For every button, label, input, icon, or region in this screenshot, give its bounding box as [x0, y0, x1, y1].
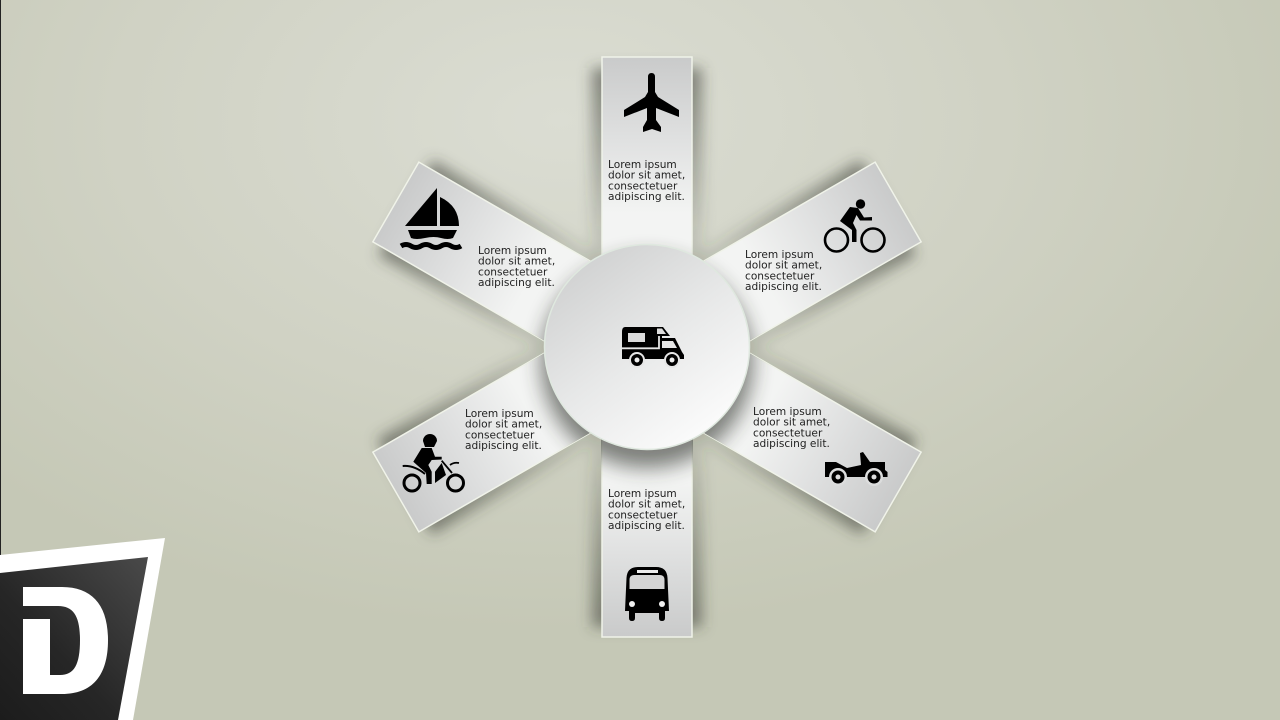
text: bicycle: dolor sit amet, [745, 260, 822, 272]
text: sailboat: Lorem ipsum [478, 245, 547, 257]
panel: diagonal band, sailboat to jeep [373, 162, 921, 532]
text: bicycle: consectetuer [745, 270, 815, 282]
text: bicycle: adipiscing elit. [745, 281, 822, 293]
text: bus: dolor sit amet, [608, 499, 685, 511]
text: jeep: adipiscing elit. [753, 438, 830, 450]
circle shadow [541, 256, 753, 468]
icon: bicycle [825, 199, 884, 252]
text: jeep: consectetuer [753, 427, 823, 439]
text: sailboat: adipiscing elit. [478, 277, 555, 289]
text: jeep: dolor sit amet, [753, 417, 830, 429]
band shadows [377, 68, 917, 627]
icon: camper van [622, 327, 684, 368]
icon: airplane [624, 73, 679, 132]
text: airplane: dolor sit amet, [608, 170, 685, 182]
text: motorcycle: Lorem ipsum [465, 408, 534, 420]
text: motorcycle: dolor sit amet, [465, 419, 542, 431]
text: sailboat: dolor sit amet, [478, 256, 555, 268]
text: motorcycle: adipiscing elit. [465, 440, 542, 452]
text: bicycle: Lorem ipsum [745, 249, 814, 261]
icon: bus [625, 567, 669, 621]
center circle [544, 244, 750, 450]
text: airplane: Lorem ipsum [608, 159, 677, 171]
text: bus: consectetuer [608, 509, 678, 521]
text: airplane: consectetuer [608, 180, 678, 192]
text: sailboat: consectetuer [478, 266, 548, 278]
logo badge [0, 538, 165, 720]
text: bus: adipiscing elit. [608, 520, 685, 532]
panel: diagonal band, bicycle to motorcycle [373, 162, 921, 532]
panel: vertical band, airplane to bus [602, 57, 692, 637]
text: jeep: Lorem ipsum [753, 406, 822, 418]
text: motorcycle: consectetuer [465, 429, 535, 441]
text: bus: Lorem ipsum [608, 488, 677, 500]
icon: motorcycle [403, 434, 464, 491]
icon: sailboat [401, 188, 461, 248]
text: airplane: adipiscing elit. [608, 191, 685, 203]
icon: jeep [825, 452, 888, 486]
